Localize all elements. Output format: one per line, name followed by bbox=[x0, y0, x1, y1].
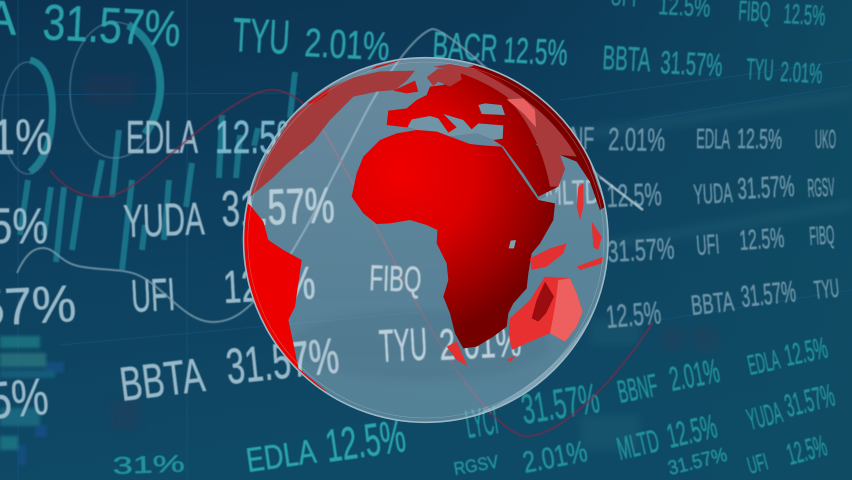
ticker rows: upper rows teal: BACR bbox=[432, 25, 499, 70]
ticker rows: middle rows pale: YUDA bbox=[693, 177, 733, 210]
lake in Africa bbox=[509, 240, 516, 248]
text seen through globe: 31.57% bbox=[223, 327, 342, 395]
dark outer band of Asia bbox=[463, 61, 605, 210]
ticker rows: middle rows pale: YUDA bbox=[123, 192, 205, 247]
ticker rows: lower rows teal: 31.57% bbox=[518, 374, 602, 433]
ticker rows: middle rows pale: 12.5% bbox=[215, 111, 305, 163]
ticker rows: lower rows teal: 31.57% bbox=[666, 444, 730, 480]
ticker rows: middle rows pale: 12.5% bbox=[604, 294, 662, 335]
ticker rows: lower rows teal: MLTD bbox=[613, 422, 662, 467]
chart: stacked horizontal bars, lower left bbox=[0, 336, 64, 465]
ticker rows: upper rows teal: 2.01% bbox=[304, 21, 391, 69]
ticker rows: middle rows pale: BBTA bbox=[689, 286, 736, 321]
ticker rows: upper rows teal: 12.5% bbox=[503, 29, 569, 73]
ticker rows: middle rows pale: 31.57% bbox=[223, 327, 342, 395]
ticker rows: middle rows pale bbox=[0, 109, 840, 431]
text seen through globe: 12.5% bbox=[222, 256, 316, 313]
ticker rows: lower rows teal: 2.01% bbox=[666, 352, 723, 399]
ticker rows: lower rows teal: 2.01% bbox=[520, 435, 590, 480]
reflection band across Asia bbox=[433, 64, 577, 187]
ticker rows: middle rows pale: UFI bbox=[695, 228, 720, 261]
text seen through globe: 31.57% bbox=[220, 177, 335, 237]
chart: ring arcs, upper left bbox=[2, 22, 160, 174]
globe: glass sphere bbox=[244, 58, 608, 422]
globe: rim bbox=[243, 58, 608, 422]
text seen through globe: 2.01% bbox=[438, 317, 522, 370]
ticker rows: lower rows teal: 12.5% bbox=[663, 408, 721, 456]
text seen through globe: MLTD bbox=[544, 173, 600, 213]
continent: Europe and Asia bbox=[387, 63, 605, 210]
ticker rows: upper rows teal: TYU bbox=[231, 9, 291, 65]
ticker rows: lower rows teal: YUDA bbox=[744, 396, 786, 437]
seas: Mediterranean and Black Sea bbox=[407, 103, 558, 204]
ticker rows: middle rows pale: 31.57% bbox=[607, 233, 675, 269]
continent: North America seen through the globe bbox=[250, 71, 415, 197]
ticker rows: upper rows teal: BBTA bbox=[602, 39, 652, 80]
ticker rows: upper rows teal: 31.57% bbox=[660, 44, 723, 83]
continent: Australia bbox=[509, 277, 583, 350]
ticker rows: lower rows teal: LYCI bbox=[463, 398, 501, 447]
ticker rows: upper rows teal: TYU bbox=[746, 53, 774, 87]
ticker rows: lower rows teal: UFI bbox=[745, 449, 771, 480]
ticker rows: middle rows pale: 12.5% bbox=[738, 222, 785, 256]
ticker rows: middle rows pale: 12.5% bbox=[737, 123, 782, 155]
globe: continents bbox=[237, 59, 605, 393]
ticker rows: middle rows pale: 31.57% bbox=[737, 170, 795, 206]
ticker rows: lower rows teal: RGSV bbox=[452, 451, 500, 479]
Asia light patch bbox=[507, 98, 536, 127]
ticker rows: lower rows teal: 31% bbox=[112, 451, 185, 480]
ticker rows: middle rows pale: 12.5% bbox=[222, 256, 316, 313]
text seen through globe bbox=[248, 179, 600, 376]
ticker rows: middle rows pale: 12.5% bbox=[606, 176, 662, 214]
ticker rows: upper rows teal bbox=[0, 0, 826, 89]
ticker rows: lower rows teal: BBNF bbox=[614, 367, 661, 410]
ticker rows: lower rows teal: EDLA bbox=[244, 433, 319, 480]
ticker rows: lower rows teal: EDLA bbox=[745, 344, 783, 381]
ticker rows: middle rows pale: BBTA bbox=[117, 349, 208, 412]
trend line: grey curve bbox=[17, 29, 643, 322]
continent: Africa bbox=[352, 130, 555, 348]
Scandinavia and Baltic edge bbox=[427, 68, 462, 87]
continent: top red fringe bbox=[307, 59, 418, 103]
chart: vertical teal bars, left bbox=[20, 72, 295, 270]
ticker rows: middle rows pale: EDLA bbox=[126, 111, 198, 163]
trend line: red curve bbox=[50, 90, 653, 436]
ticker rows: middle rows pale: EDLA bbox=[696, 123, 731, 155]
ticker rows: lower rows teal: 12.5% bbox=[322, 409, 409, 472]
ticker rows: middle rows pale: UFI bbox=[130, 268, 176, 322]
ticker rows: middle rows pale: 2.01% bbox=[608, 121, 665, 158]
ticker rows: middle rows pale: NF bbox=[570, 120, 595, 156]
text seen through globe: FIBQ bbox=[369, 257, 422, 300]
Australia shaded desert bbox=[532, 282, 554, 322]
continent: South America bbox=[244, 204, 326, 392]
text seen through globe: TYU bbox=[378, 318, 428, 372]
ticker rows: middle rows pale: 31.57% bbox=[739, 275, 797, 314]
ticker rows: middle rows pale: 31.57% bbox=[220, 177, 335, 237]
ticker rows: lower rows teal bbox=[112, 332, 838, 480]
Indonesia islands bbox=[447, 183, 603, 366]
Australia light east bbox=[550, 278, 583, 342]
